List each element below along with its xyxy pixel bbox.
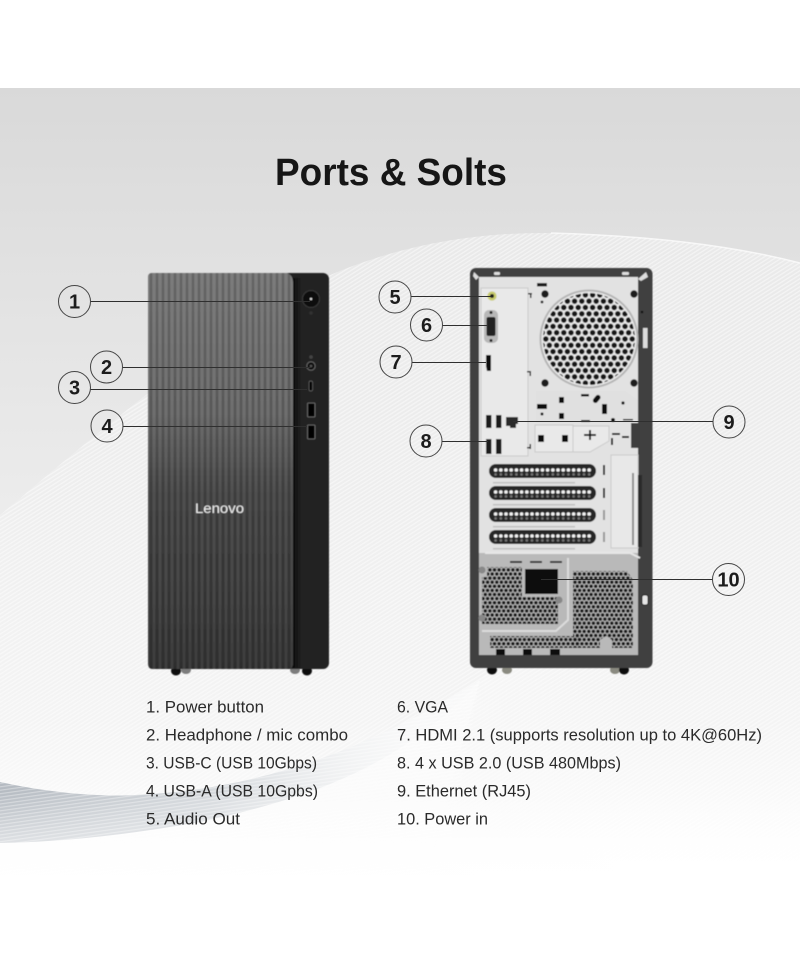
fan screw holes bbox=[537, 283, 638, 387]
USB-C port bbox=[309, 381, 313, 391]
callout badge 1: 1 bbox=[69, 292, 80, 314]
port legend left column: 2. Headphone / mic combo bbox=[146, 726, 348, 744]
slot retention bracket bbox=[603, 455, 642, 548]
callout badge 3 bbox=[58, 372, 90, 404]
ethernet port bbox=[506, 417, 518, 428]
callout badge 10 bbox=[712, 564, 744, 596]
callout badge 3: 3 bbox=[69, 378, 80, 400]
callout badge 8 bbox=[410, 425, 442, 457]
expansion slots bbox=[489, 464, 596, 550]
cooling fan grille bbox=[540, 290, 638, 388]
I/O shield bbox=[481, 288, 528, 456]
port legend right column: 9. Ethernet (RJ45) bbox=[397, 782, 531, 800]
side front bezel bbox=[280, 273, 329, 669]
callout badge 9: 9 bbox=[723, 412, 735, 434]
rear feet bbox=[487, 666, 629, 674]
HDMI port bbox=[486, 355, 491, 371]
port legend left column bbox=[146, 698, 348, 828]
chassis frame bbox=[470, 268, 652, 668]
port legend right column: 7. HDMI 2.1 (supports resolution up to 4K@60Hz) bbox=[397, 726, 762, 744]
callout badge 1 bbox=[58, 286, 90, 318]
power socket bbox=[525, 569, 558, 594]
callout badge 2: 2 bbox=[101, 357, 112, 379]
power button bbox=[302, 290, 320, 315]
callout badge 5 bbox=[379, 281, 411, 313]
power supply bbox=[478, 553, 640, 655]
port legend left column: 4. USB-A (USB 10Gpbs) bbox=[146, 782, 318, 800]
port legend left column: 1. Power button bbox=[146, 698, 264, 716]
headphone jack bbox=[307, 355, 315, 370]
light rear panel bbox=[479, 277, 638, 655]
callout badge 4 bbox=[91, 410, 123, 442]
bezel shadow bbox=[292, 278, 302, 668]
port legend left column: 3. USB-C (USB 10Gbps) bbox=[146, 754, 317, 772]
port legend right column: 8. 4 x USB 2.0 (USB 480Mbps) bbox=[397, 754, 621, 772]
callout badge 4: 4 bbox=[101, 416, 113, 438]
port legend right column bbox=[397, 698, 762, 828]
tower feet bbox=[171, 666, 312, 676]
title: Ports & Solts bbox=[275, 152, 507, 194]
shield corner marks bbox=[527, 293, 532, 449]
USB 2.0 ports bbox=[486, 415, 502, 454]
callout badge 9 bbox=[713, 406, 745, 438]
callout badge 10: 10 bbox=[717, 570, 740, 592]
knockout panel bbox=[536, 311, 643, 423]
VGA port bbox=[484, 310, 498, 343]
callout badge 6 bbox=[410, 309, 442, 341]
callout badge 2 bbox=[90, 351, 122, 383]
callout badge 5: 5 bbox=[389, 287, 401, 309]
port legend right column: 10. Power in bbox=[397, 810, 488, 828]
kensington lock bbox=[642, 595, 648, 605]
callout badge 7 bbox=[380, 346, 412, 378]
bracket with plus mark bbox=[535, 425, 629, 452]
audio out jack bbox=[487, 291, 497, 301]
right case accent bbox=[631, 328, 648, 448]
callout badge 6: 6 bbox=[421, 315, 432, 337]
callout badge 7: 7 bbox=[390, 352, 402, 374]
upper corner marks bbox=[473, 272, 648, 281]
Lenovo logo: Lenovo bbox=[195, 501, 244, 516]
ribbed front panel bbox=[148, 273, 293, 669]
USB-A port upper bbox=[308, 403, 315, 417]
callout lines bbox=[90, 296, 713, 580]
rear view of desktop tower bbox=[470, 268, 652, 674]
USB-A port lower bbox=[308, 425, 315, 439]
port legend left column: 5. Audio Out bbox=[146, 810, 240, 828]
port legend right column: 6. VGA bbox=[397, 698, 448, 716]
front view of desktop tower bbox=[148, 273, 329, 676]
callout badge 8: 8 bbox=[420, 431, 432, 453]
